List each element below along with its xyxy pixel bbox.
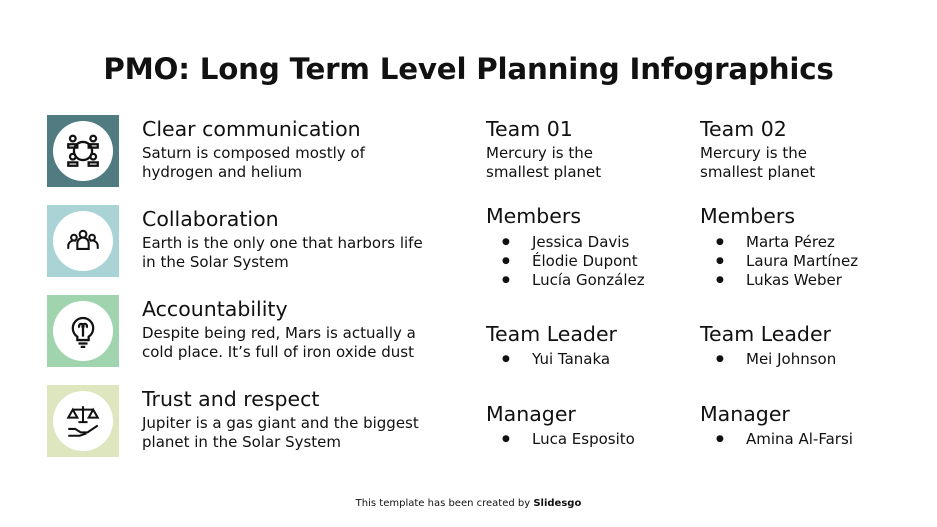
block: collaboration: in the Solar System: [142, 252, 289, 270]
column: team 02: Team 02: [700, 117, 787, 141]
column: team 01: Manager: [486, 402, 576, 426]
column: team 02: Laura Martínez: [746, 252, 858, 270]
column: team 02: Team Leader: [700, 322, 831, 346]
block: trust: Jupiter is a gas giant and the biggest: [142, 414, 419, 432]
column: team 02: Manager: [700, 402, 790, 426]
block: accountability: Accountability: [142, 297, 288, 321]
column: team 01: Team 01: [486, 117, 573, 141]
column: team 01: Mercury is the: [486, 144, 593, 162]
column: team 01: Jessica Davis: [532, 233, 629, 251]
column: team 02: Amina Al-Farsi: [746, 430, 853, 448]
column: team 01: Team Leader: [486, 322, 617, 346]
column: team 01: smallest planet: [486, 162, 601, 180]
column: team 02: Marta Pérez: [746, 233, 835, 251]
block: trust: Trust and respect: [142, 387, 319, 411]
block: accountability: Despite being red, Mars is actually a: [142, 324, 416, 342]
block: accountability: [142, 297, 416, 360]
icon: collaboration: [47, 205, 119, 277]
column: team 01: Yui Tanaka: [532, 350, 610, 368]
column: team 02: [700, 117, 858, 448]
icon: communication: [47, 115, 119, 187]
block: clear communication: Saturn is composed mostly of: [142, 144, 365, 162]
block: clear communication: [142, 117, 366, 180]
block: collaboration: Earth is the only one that harbors life: [142, 234, 423, 252]
column: team 01: Élodie Dupont: [532, 252, 638, 270]
block: trust: [141, 387, 419, 450]
block: accountability: cold place. It’s full of iron oxide dust: [142, 342, 414, 360]
block: trust: planet in the Solar System: [142, 432, 341, 450]
footer: This template has been created by Slidesgo: [356, 498, 581, 509]
column: team 02: Mercury is the: [700, 144, 807, 162]
block: collaboration: Collaboration: [142, 207, 279, 231]
column: team 02: Mei Johnson: [746, 350, 836, 368]
column: team 01: Lucía González: [532, 271, 645, 289]
block: collaboration: [142, 207, 423, 270]
icon: bulb: [47, 295, 119, 367]
title: PMO: Long Term Level Planning Infographics: [103, 52, 834, 86]
column: team 02: Lukas Weber: [746, 271, 842, 289]
column: team 01: Members: [486, 204, 581, 228]
icon: scales: [47, 385, 119, 457]
block: clear communication: Clear communication: [142, 117, 361, 141]
column: team 01: [486, 117, 645, 448]
block: clear communication: hydrogen and helium: [142, 162, 302, 180]
column: team 02: Members: [700, 204, 795, 228]
column: team 02: smallest planet: [700, 162, 815, 180]
column: team 01: Luca Esposito: [532, 430, 635, 448]
